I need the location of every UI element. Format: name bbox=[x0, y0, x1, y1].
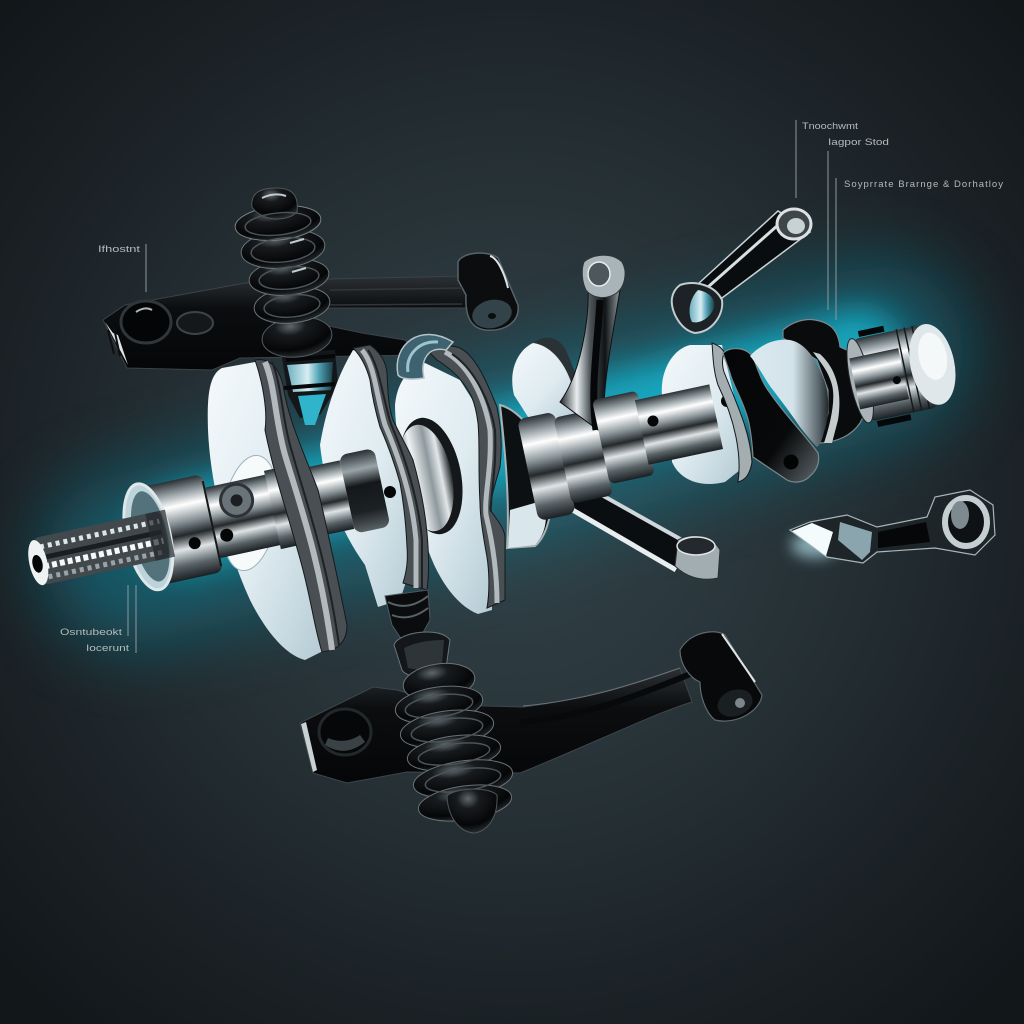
lower rocker arm bbox=[300, 632, 762, 783]
counterweight 6 lip bbox=[813, 352, 839, 443]
journal between counterweights 1 and 2 bbox=[303, 448, 390, 541]
callout: lower left labels: Iocerunt bbox=[86, 643, 129, 654]
spring collar bbox=[394, 632, 450, 677]
callout: upper left label: Ifhostnt bbox=[98, 244, 140, 255]
bore bbox=[319, 709, 371, 755]
spring neck bbox=[385, 590, 430, 640]
rim bbox=[430, 346, 505, 608]
arm bore left bbox=[121, 301, 171, 343]
rod small end bbox=[777, 209, 811, 239]
hub disc bbox=[215, 452, 285, 574]
teal glow behind crankshaft bbox=[130, 350, 880, 560]
pulley body bbox=[851, 325, 939, 422]
right shaft section with counterweight 5 bbox=[592, 343, 752, 484]
callout: top right labels: Iagpor Stod bbox=[828, 137, 889, 148]
crescent bracket bbox=[397, 334, 453, 379]
rim bbox=[255, 360, 347, 652]
pulley shaft bbox=[849, 348, 909, 409]
callout: lower left labels bbox=[60, 585, 136, 654]
collar bbox=[138, 474, 223, 586]
callout: upper left label bbox=[98, 244, 146, 292]
lower crank conrod bbox=[563, 478, 720, 579]
counterweight 2 rim bbox=[353, 345, 428, 590]
counterweight 6 face bbox=[750, 340, 828, 447]
arm end cylinder bbox=[680, 632, 762, 721]
rear counterweight bbox=[512, 338, 585, 420]
callout: lower left labels: Osntubeokt bbox=[60, 627, 122, 638]
callout: top right labels: Soyprrate Brarnge & Dorhatloy bbox=[844, 179, 1003, 190]
counterweight 2 white face bbox=[320, 350, 412, 607]
end face bbox=[902, 320, 962, 409]
spring neck bbox=[281, 350, 338, 418]
thread bbox=[33, 511, 170, 585]
front collar and threaded end bbox=[18, 461, 267, 615]
right end pulley bbox=[840, 313, 964, 431]
shaft journal at counterweight 1 bbox=[200, 466, 304, 563]
upper rocker arm bbox=[103, 253, 518, 370]
crank pin bbox=[517, 403, 615, 521]
main bearing bbox=[390, 412, 472, 540]
rim bbox=[712, 343, 752, 482]
crank web right bbox=[723, 349, 819, 482]
lower right conrod bbox=[790, 490, 995, 563]
arm end cylinder bbox=[458, 253, 518, 332]
callout: top right labels bbox=[796, 120, 1003, 320]
thread tip bbox=[25, 538, 52, 587]
port and oil holes bbox=[218, 481, 256, 519]
web hole bbox=[784, 454, 798, 470]
counterweight 1 bbox=[200, 360, 347, 660]
upper conrod (top right) bbox=[672, 209, 811, 333]
lower coil spring bbox=[385, 590, 515, 833]
counterweight 3 bbox=[390, 334, 505, 614]
callout: top right labels: Tnoochwmt bbox=[802, 121, 858, 132]
flange bbox=[115, 479, 181, 594]
rod big end bbox=[672, 283, 722, 333]
rear rim of counterweight 6 bbox=[783, 319, 868, 443]
centre crank web and conrod bbox=[500, 255, 625, 548]
upper coil spring bbox=[233, 188, 338, 425]
conrod up bbox=[560, 283, 620, 435]
